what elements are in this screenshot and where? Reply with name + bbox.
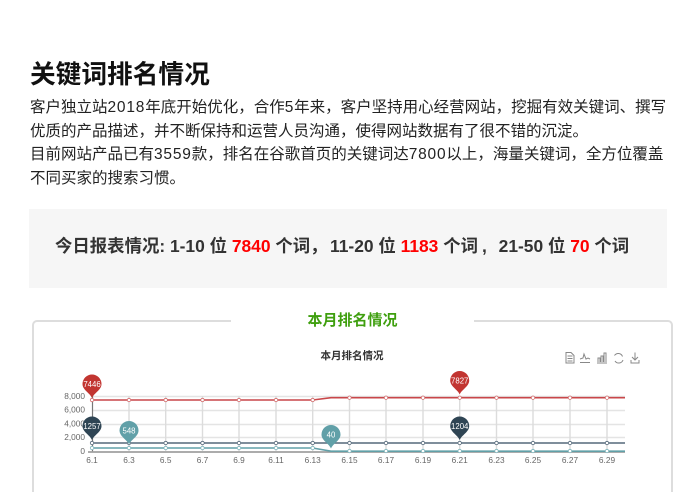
x axis labels: 6.9 (233, 455, 245, 465)
marker pin: 548: 548 (122, 426, 136, 435)
x axis labels: 6.21 (452, 455, 468, 465)
panel: monthly ranking chart (32, 320, 673, 492)
marker pin: 7446 (82, 374, 102, 398)
marker pin: 1257: 1257 (83, 422, 101, 431)
x axis labels: 6.19 (415, 455, 431, 465)
axes (92, 396, 94, 452)
marker pin: 548 (120, 421, 138, 444)
x axis labels: 6.25 (525, 455, 541, 465)
series: top 1-10 (90, 396, 625, 402)
marker pin: 40: 40 (327, 430, 336, 439)
marker pin: 40 (322, 425, 340, 448)
marker pin: 1257 (82, 416, 102, 440)
x axis labels: 6.3 (123, 455, 135, 465)
intro text block: 客户独立站2018年底开始优化，合作5年来，客户坚持用心经营网站，挖掘有效关键词、撰写 (30, 99, 666, 116)
title: 关键词排名情况 (30, 61, 210, 89)
x axis labels: 6.29 (599, 455, 615, 465)
x axis labels: 6.27 (562, 455, 578, 465)
x axis labels: 6.11 (268, 455, 284, 465)
y axis labels: 6,000 (64, 404, 85, 414)
panel heading: monthly ranking: 本月排名情况 (307, 312, 398, 329)
y axis labels: 0 (80, 446, 85, 456)
line chart (64, 349, 640, 465)
y axis labels: 8,000 (64, 391, 85, 401)
panel heading: monthly ranking (231, 311, 474, 331)
x axis labels: 6.1 (86, 455, 98, 465)
x axis labels: 6.17 (378, 455, 394, 465)
intro text block: 优质的产品描述，并不断保持和运营人员沟通，使得网站数据有了很不错的沉淀。 (30, 123, 588, 140)
intro text block: 目前网站产品已有3559款，排名在谷歌首页的关键词达7800以上，海量关键词，全方位覆盖 (30, 146, 663, 163)
y axis labels (64, 391, 85, 456)
x axis labels: 6.5 (160, 455, 172, 465)
x axis labels: 6.7 (197, 455, 209, 465)
x axis labels (86, 455, 615, 465)
marker pin: 7827: 7827 (451, 376, 468, 385)
intro text block: 不同买家的搜索习惯。 (30, 170, 185, 187)
today's report text: 今日报表情况: 1-10 位 7840 个词，11-20 位 1183 个词, 21-50 位 70 个词 (55, 236, 629, 256)
y axis labels: 4,000 (64, 418, 85, 428)
series: top 11-20 (90, 441, 625, 445)
marker pin: 1204: 1204 (451, 422, 469, 431)
x axis labels: 6.23 (488, 455, 505, 465)
chart title: 本月排名情况 (320, 349, 384, 362)
x axis labels: 6.15 (341, 455, 358, 465)
panel: today's report (29, 209, 667, 288)
marker pin: 7446: 7446 (83, 380, 101, 389)
intro text block (30, 98, 666, 187)
y axis labels: 2,000 (64, 432, 85, 442)
marker pin: 1204 (450, 416, 469, 440)
toolbox icons (566, 352, 639, 363)
series: top 21-50 (90, 446, 625, 453)
marker pin: 7827 (450, 371, 469, 394)
grid lines (92, 396, 625, 451)
x axis labels: 6.13 (305, 455, 321, 465)
